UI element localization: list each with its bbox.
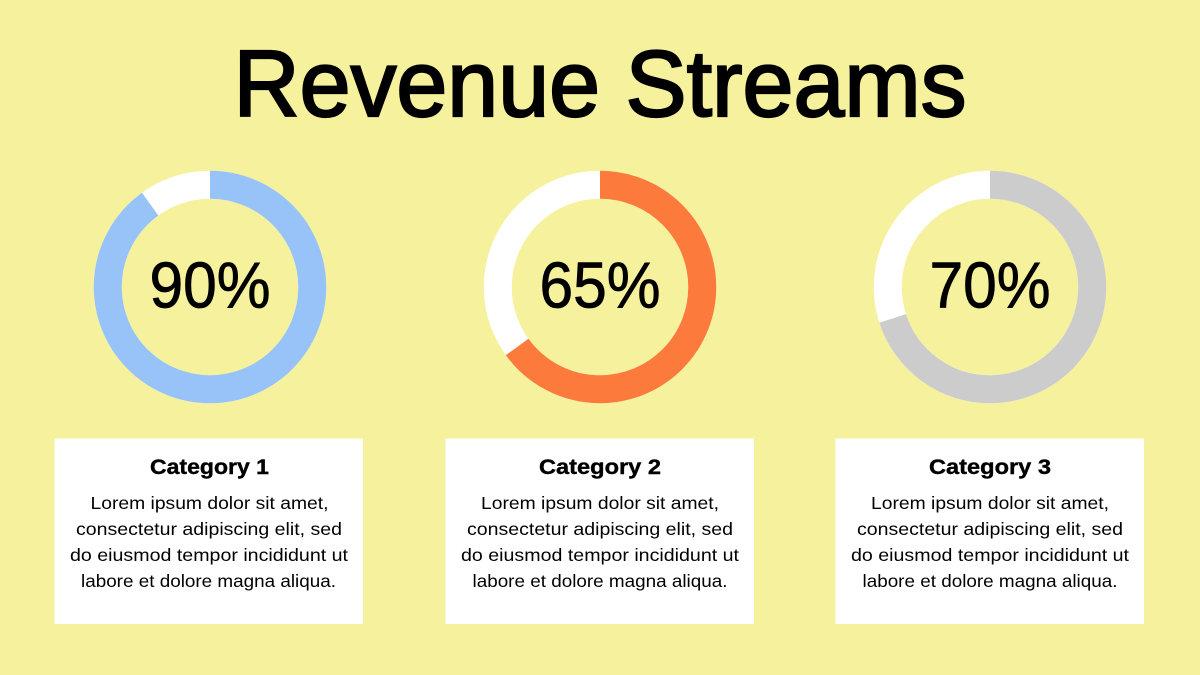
title: Revenue Streams bbox=[234, 31, 966, 136]
card: category 1 text: do eiusmod tempor incididunt ut bbox=[70, 545, 348, 565]
card: category 2 text: Lorem ipsum dolor sit amet, bbox=[481, 493, 719, 513]
panel: category 3 bbox=[836, 185, 1144, 624]
card: category 2 text: labore et dolore magna aliqua. bbox=[472, 571, 728, 591]
card: category 2 text: consectetur adipiscing elit, sed bbox=[467, 519, 733, 539]
donut chart: 90%: 90% bbox=[150, 248, 270, 322]
card: category 3 text bbox=[836, 438, 1144, 624]
donut chart: 70% bbox=[888, 185, 1092, 389]
panel: category 1 bbox=[54, 185, 363, 624]
card: category 2 text: do eiusmod tempor incididunt ut bbox=[461, 545, 739, 565]
card: category 3 text: labore et dolore magna aliqua. bbox=[862, 571, 1118, 591]
card: category 1 text: labore et dolore magna aliqua. bbox=[81, 571, 336, 591]
panel: category 2 bbox=[446, 185, 754, 624]
card: category 3 text: do eiusmod tempor incididunt ut bbox=[851, 545, 1129, 565]
donut chart: 90% bbox=[108, 185, 312, 389]
card: category 1 text: Category 1 bbox=[150, 456, 269, 479]
card: category 3 text: Category 3 bbox=[929, 456, 1051, 479]
donut chart: 70%: 70% bbox=[930, 248, 1050, 322]
card: category 3 text: consectetur adipiscing elit, sed bbox=[857, 519, 1123, 539]
donut chart: 65%: 65% bbox=[540, 248, 660, 322]
card: category 3 text: Lorem ipsum dolor sit amet, bbox=[871, 493, 1109, 513]
card: category 1 text: consectetur adipiscing elit, sed bbox=[76, 519, 342, 539]
card: category 2 text bbox=[446, 438, 754, 624]
card: category 1 text: Lorem ipsum dolor sit amet, bbox=[90, 493, 328, 513]
donut chart: 65% bbox=[498, 185, 702, 389]
card: category 2 text: Category 2 bbox=[539, 456, 661, 479]
card: category 1 text bbox=[54, 438, 363, 624]
